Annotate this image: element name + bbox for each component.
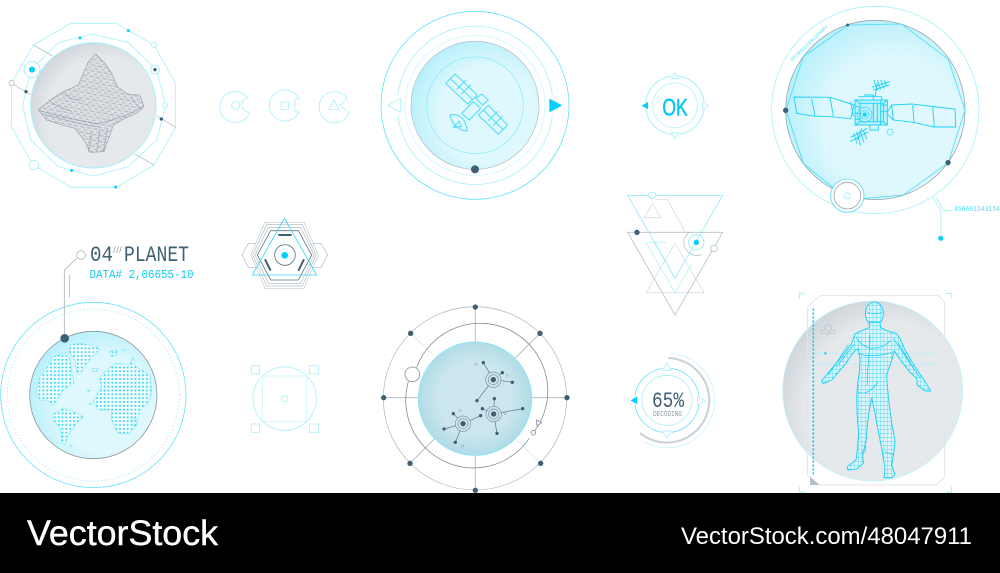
panel: network	[381, 304, 570, 493]
leader ring	[77, 251, 85, 259]
icon: square button	[269, 90, 299, 121]
top ring	[649, 192, 656, 199]
icon: triangle button	[319, 92, 349, 123]
arrow left	[388, 98, 401, 112]
panel: OK button	[642, 73, 709, 139]
side ring	[711, 245, 717, 252]
heading: planet	[90, 243, 194, 282]
dotted ring	[7, 309, 179, 481]
ring broken	[635, 368, 699, 433]
rim dots	[381, 304, 570, 493]
node markers	[9, 29, 168, 188]
cyan triangle	[628, 195, 723, 278]
body contours	[828, 312, 920, 455]
ok outer ring	[646, 76, 704, 135]
antenna upper	[872, 80, 890, 97]
node graph	[442, 361, 524, 447]
panel: satellite dial	[381, 11, 569, 199]
wireframe body	[822, 302, 931, 478]
mountain disc	[31, 43, 156, 168]
cyan chevron	[646, 242, 692, 293]
ok arrows	[642, 73, 709, 139]
arc code: 3457485651564623594854	[789, 24, 829, 63]
outer ring	[381, 11, 569, 199]
icon: satellite	[446, 74, 508, 134]
gauge caption: DECODING	[653, 411, 682, 419]
lens marker	[831, 179, 864, 212]
grey triangle	[628, 232, 723, 315]
icon: square target	[251, 366, 319, 432]
wireframe mountain	[38, 54, 144, 153]
planet data: DATA# 2,06655-10	[90, 268, 194, 282]
icon row: circle, square, triangle buttons	[220, 90, 349, 123]
leader dot	[60, 334, 69, 343]
callout dot	[938, 236, 943, 241]
leader line	[64, 258, 77, 338]
planet number: 04	[90, 243, 113, 268]
right solar panel	[892, 104, 956, 127]
head	[865, 302, 883, 325]
scan lines	[815, 353, 936, 364]
inner polygon frame	[23, 34, 166, 176]
icon: hexagon target	[242, 218, 328, 288]
footer logo: VectorStock	[27, 514, 219, 553]
corner wedge	[810, 477, 819, 485]
network disc	[418, 342, 532, 455]
planet title: PLANET	[124, 243, 189, 268]
inner ring	[427, 57, 523, 154]
outer ring	[383, 307, 567, 490]
position dot	[471, 165, 479, 173]
scan disc	[783, 301, 963, 481]
dashed scale	[811, 308, 816, 474]
dark dot	[634, 230, 640, 235]
pale spokes	[411, 333, 541, 463]
ring inner	[642, 375, 692, 425]
panel: triangles	[628, 192, 723, 315]
planet slashes: ///	[113, 246, 122, 256]
outer ring	[1, 302, 186, 488]
grey connectors	[12, 45, 176, 165]
middle ring	[406, 323, 548, 468]
ok inner ring	[653, 83, 697, 128]
target	[684, 232, 704, 255]
scan dot	[824, 352, 826, 354]
globe disc	[30, 331, 157, 459]
footer url: VectorStock.com/48047911	[681, 523, 972, 550]
icon: circle button	[220, 91, 250, 122]
spacecraft	[794, 80, 956, 145]
panel: human scan	[783, 293, 963, 492]
torso, arms and legs	[822, 322, 931, 478]
broken ring	[398, 26, 552, 185]
panel: planet globe	[1, 251, 186, 488]
spacecraft body	[855, 100, 887, 125]
blue disc	[411, 41, 539, 169]
grey arc	[640, 358, 709, 443]
outer circle	[772, 6, 979, 214]
pale triangles	[644, 199, 704, 293]
antenna lower	[850, 128, 868, 145]
spokes	[383, 307, 567, 490]
outer polygon frame	[12, 23, 176, 187]
hex glyphs	[822, 324, 835, 335]
panel: mountain radar	[9, 23, 176, 188]
thin ring	[405, 35, 545, 175]
small ring	[531, 430, 536, 435]
disc	[786, 20, 965, 200]
panel: satellite radar	[772, 6, 979, 241]
arrow right	[549, 99, 562, 112]
gauge outer ring	[643, 353, 715, 448]
inner frame	[808, 296, 945, 485]
scan frame	[799, 293, 952, 492]
small arrow	[536, 420, 542, 426]
callout line	[933, 197, 952, 238]
footer band	[0, 493, 1000, 573]
ok label: OK	[662, 95, 688, 122]
world map	[37, 343, 152, 447]
marker dots	[783, 23, 951, 165]
handle ring	[405, 367, 420, 382]
gauge value: 65%	[652, 389, 685, 414]
polygon	[786, 24, 965, 200]
panel: decoding gauge	[630, 353, 715, 448]
arrows	[630, 363, 705, 438]
left solar panel	[794, 97, 854, 119]
